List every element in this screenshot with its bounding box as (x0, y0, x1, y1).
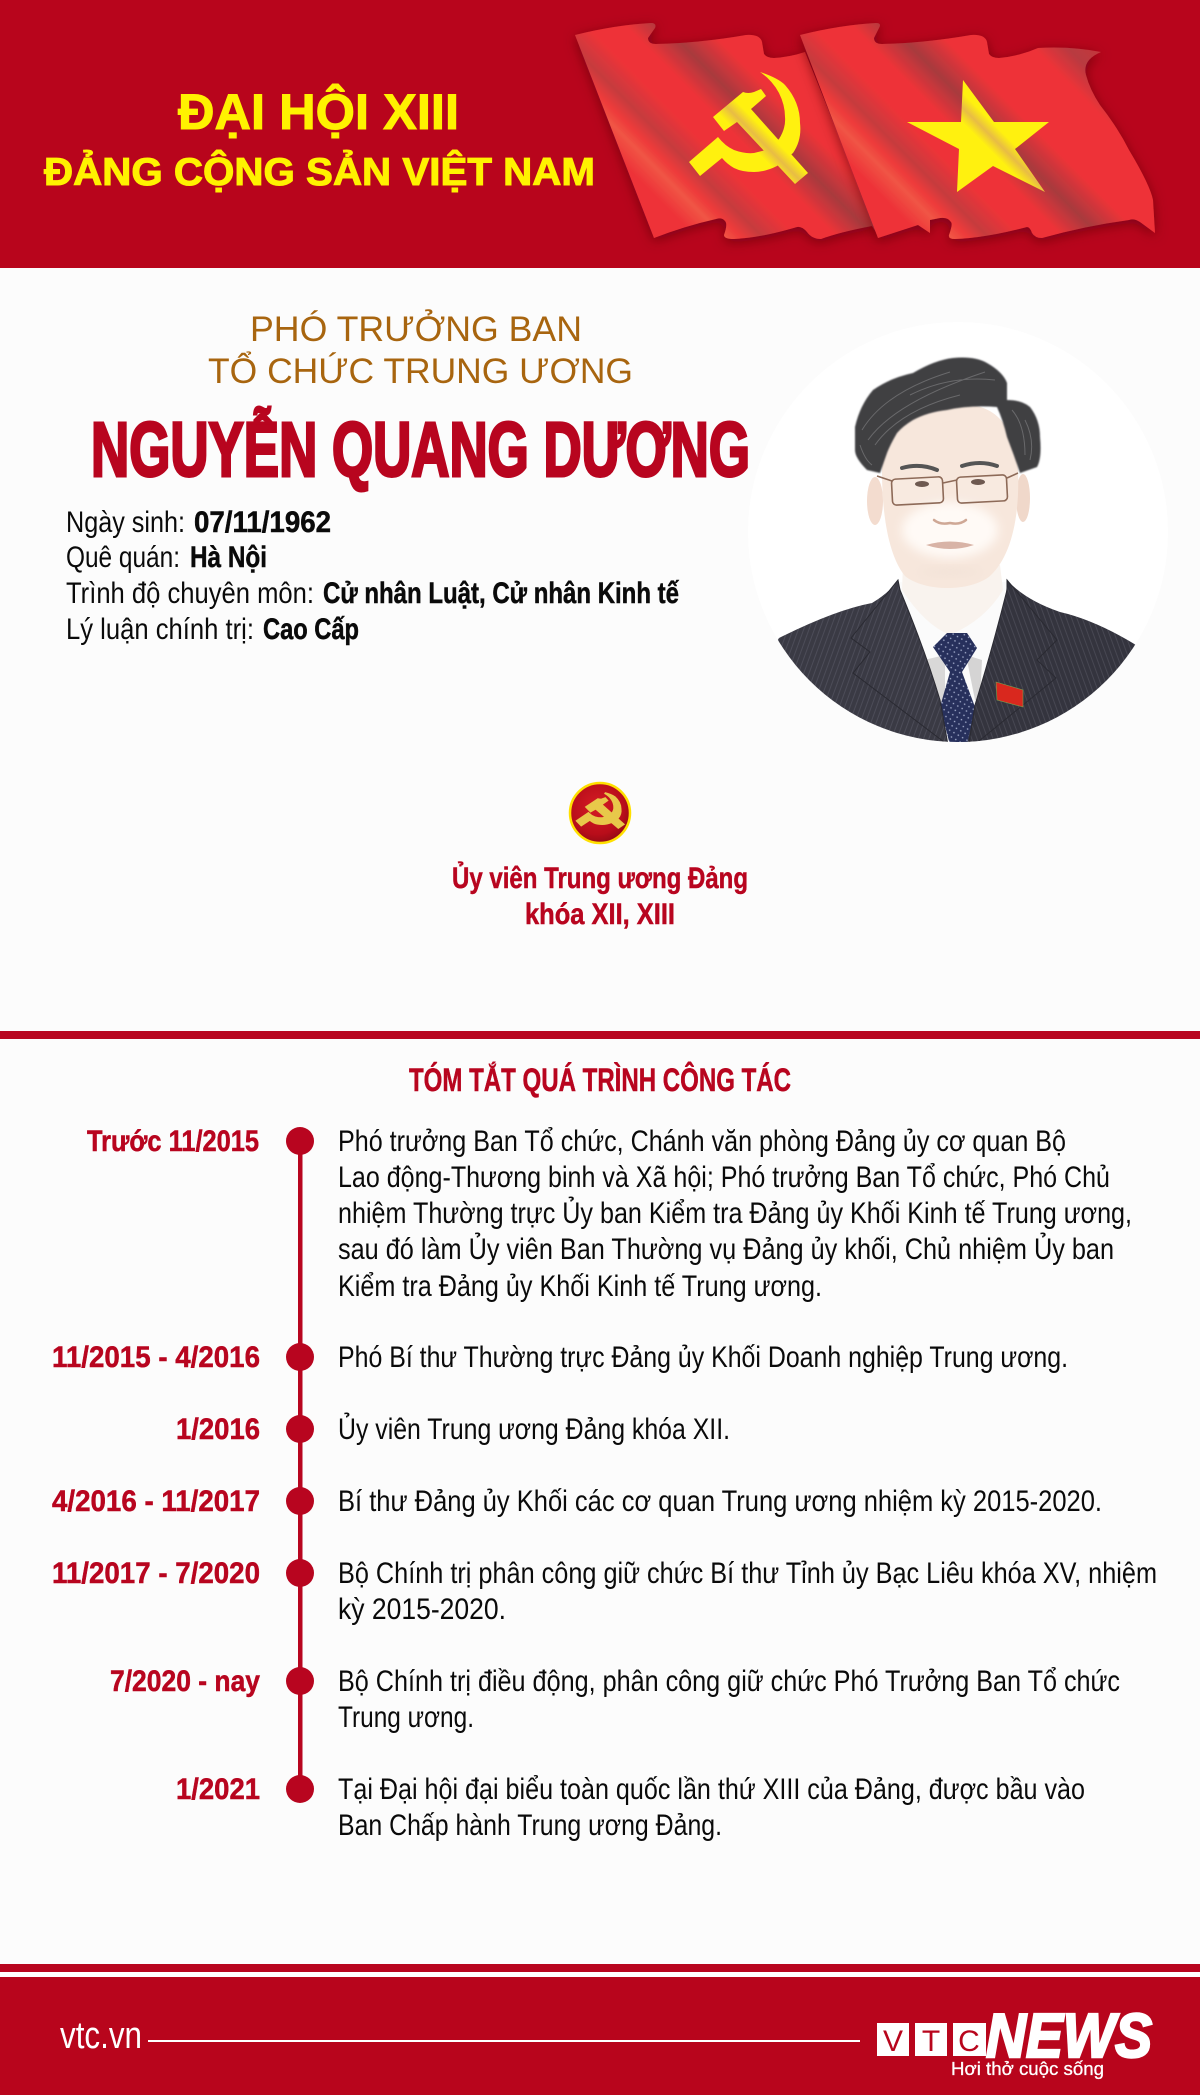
header title: ĐẠI HỘI XIII (178, 83, 459, 140)
entry: 11/2017 - 7/2020: 11/2017 - 7/2020 (52, 1557, 260, 1590)
nose (934, 520, 966, 524)
position title (208, 309, 633, 391)
entry: 1/2016 (176, 1412, 730, 1446)
entry: before 11/2015 (87, 1125, 1132, 1303)
timeline spine (298, 1141, 302, 1789)
suit jacket (778, 590, 943, 742)
portrait background circle (748, 322, 1168, 742)
entry: 1/2016: 1/2016 (176, 1413, 260, 1446)
hair (855, 358, 1041, 473)
central committee membership (452, 861, 748, 931)
lapel pin (996, 682, 1023, 707)
entry: 1/2021 (176, 1773, 1085, 1842)
timeline heading: TÓM TẮT QUÁ TRÌNH CÔNG TÁC (409, 1062, 791, 1098)
footer site name: vtc.vn (60, 2015, 142, 2057)
entry: 11/2017 - 7/2020: kỳ 2015-2020. (338, 1593, 506, 1626)
jacket lapels (851, 580, 948, 745)
VTC News logo (877, 2002, 1152, 2079)
VTC News logo: Hơi thở cuộc sống (951, 2059, 1104, 2079)
icon: party emblem (570, 783, 630, 843)
personal details: Ngày sinh: (66, 506, 185, 539)
face (882, 404, 1018, 588)
header banner (0, 0, 1200, 268)
personal details: Cao Cấp (263, 613, 359, 646)
entry: 7/2020 - now: 7/2020 - nay (110, 1665, 260, 1698)
eyebrows (902, 463, 997, 470)
name heading: NGUYỄN QUANG DƯƠNG (91, 406, 750, 493)
VTC News logo: V (883, 2025, 903, 2058)
entry: 1/2021: Ban Chấp hành Trung ương Đảng. (338, 1809, 722, 1842)
entry: 4/2016 - 11/2017 (52, 1485, 1102, 1518)
entry: 1/2021: 1/2021 (176, 1773, 260, 1806)
entry: 7/2020 - now: Trung ương. (338, 1701, 474, 1734)
header title (44, 83, 595, 194)
entry: 7/2020 - now (110, 1665, 1120, 1734)
personal details (66, 506, 679, 646)
header title: ĐẢNG CỘNG SẢN VIỆT NAM (44, 149, 595, 194)
personal details: Lý luận chính trị: (66, 613, 254, 646)
VTC News logo: NEWS (986, 2002, 1152, 2071)
ears (867, 477, 883, 525)
personal details: Cử nhân Luật, Cử nhân Kinh tế (323, 577, 679, 610)
entry: 1/2016: Ủy viên Trung ương Đảng khóa XII. (338, 1412, 730, 1446)
necktie (933, 633, 977, 745)
entry: 11/2015 - 4/2016 (52, 1341, 1068, 1374)
position title: PHÓ TRƯỞNG BAN (250, 309, 582, 349)
VTC News logo: T (922, 2025, 940, 2058)
VTC News logo: C (958, 2025, 980, 2058)
entry: before 11/2015: Phó trưởng Ban Tổ chức, Chánh văn phòng Đảng ủy cơ quan Bộ (338, 1125, 1066, 1158)
central committee membership: khóa XII, XIII (525, 898, 675, 931)
footer (0, 1977, 1200, 2095)
entry: before 11/2015: Kiểm tra Đảng ủy Khối Kinh tế Trung ương. (338, 1270, 822, 1303)
glasses (877, 473, 1018, 505)
shirt and collar (898, 582, 1007, 715)
central committee membership: Ủy viên Trung ương Đảng (452, 861, 748, 895)
entry: 11/2015 - 4/2016: 11/2015 - 4/2016 (52, 1341, 260, 1374)
position title: TỔ CHỨC TRUNG ƯƠNG (208, 351, 633, 391)
entry: 4/2016 - 11/2017: 4/2016 - 11/2017 (52, 1485, 260, 1518)
icon: national flag with star (800, 23, 1155, 239)
mouth (926, 542, 974, 549)
personal details: Hà Nội (190, 541, 267, 574)
entry: 11/2017 - 7/2020 (52, 1557, 1157, 1626)
eyes (915, 481, 929, 487)
timeline (52, 1125, 1157, 1842)
portrait photo (778, 356, 1136, 742)
entry: before 11/2015: Trước 11/2015 (87, 1125, 259, 1158)
entry: 11/2015 - 4/2016: Phó Bí thư Thường trực Đảng ủy Khối Doanh nghiệp Trung ương. (338, 1341, 1068, 1374)
personal details: Quê quán: (66, 541, 180, 574)
neck (902, 565, 1003, 635)
personal details: 07/11/1962 (194, 506, 331, 539)
icon: party flag with hammer and sickle (575, 23, 880, 239)
personal details: Trình độ chuyên môn: (66, 577, 314, 610)
